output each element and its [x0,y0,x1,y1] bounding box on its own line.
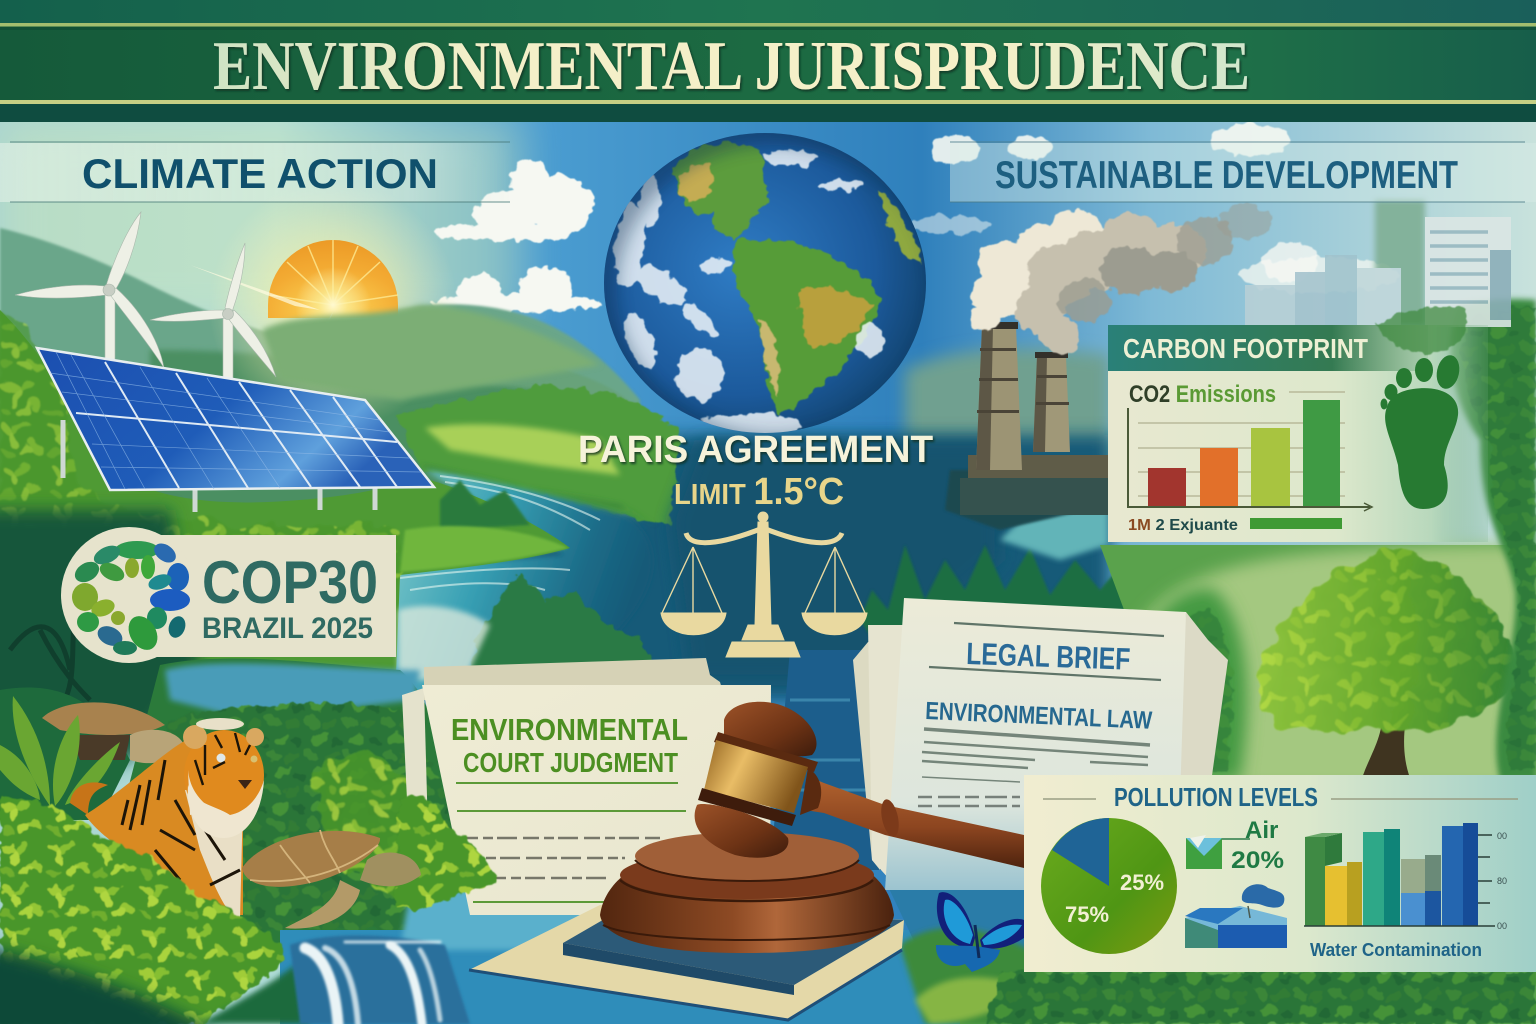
sustainable development heading [950,142,1536,202]
river [380,470,653,700]
mid trees [470,572,655,690]
riverside trees [440,480,530,530]
globe clouds [610,150,884,437]
3d bar chart: 80 [1497,876,1507,886]
court judgment document [402,658,771,915]
turtle back [42,702,184,763]
sun [190,180,600,430]
factory base dark [945,470,1108,530]
pollution title: POLLUTION LEVELS [1114,782,1318,812]
gavel head [695,702,821,858]
pie chart: 25% [1120,870,1164,895]
cop30 badge [61,527,396,663]
bar chart [1128,392,1372,511]
smoke [969,204,1271,353]
solar panel [37,348,434,512]
leaves over document [395,795,495,910]
pollution levels panel [1024,775,1536,972]
pie chart: 75% [1065,902,1109,927]
paris agreement text: PARIS AGREEMENT [578,429,933,471]
midline tree row [860,545,1210,650]
court judgment document: COURT JUDGMENT [463,747,678,778]
judgment fine print [462,838,660,878]
meadow [395,385,680,525]
climate action heading [0,142,515,202]
lower right foliage [885,880,1030,975]
gavel [600,702,1024,953]
turtle front [242,830,421,929]
judgment heading: ENVIRONMENTAL [451,712,688,747]
co2 label: CO2 Emissions [1129,381,1276,408]
far left trees [0,510,200,810]
title: ENVIRONMENTAL JURISPRUDENCE [213,28,1250,105]
continents [672,143,922,415]
scales of justice [661,512,867,657]
tiger [70,718,264,920]
butterfly [936,892,1024,972]
legal brief title: LEGAL BRIEF [966,636,1131,677]
left bank [0,310,570,700]
big tree [1258,548,1516,778]
lower water [280,930,960,1024]
3d bar chart: 00 [1497,921,1507,931]
right forest [900,545,1536,1024]
handle [805,778,1024,868]
cop30 text: COP30 [202,549,378,616]
air icon and label [1186,817,1284,874]
air icon and label: 20% [1231,847,1284,874]
book [469,905,904,1020]
plant fronds [0,696,120,806]
factory [960,204,1271,515]
top right trees [1450,299,1536,780]
3d bar chart: 00 [1497,831,1507,841]
turbine 2 [150,243,276,382]
air icon and label: Air [1245,817,1278,844]
city skyline [1245,200,1511,327]
clouds [430,124,1400,312]
foreground bright leaves [0,795,310,1024]
cop30 badge: BRAZIL 2025 [202,612,373,645]
carbon footprint panel [1108,307,1488,542]
water icon [1185,884,1287,948]
legend: 1M 2 Exjuante [1128,517,1238,534]
legal brief subtitle: ENVIRONMENTAL LAW [925,697,1153,735]
carbon footprint panel: CARBON FOOTPRINT [1123,333,1368,364]
title band [0,0,1536,122]
wind turbines [15,212,276,382]
tiger head [184,730,264,820]
turbine 1 [15,212,164,368]
far hills [0,228,640,560]
foreground mid foliage [120,659,490,960]
panel header [1108,325,1428,371]
climate action heading: CLIMATE ACTION [82,150,438,197]
dark river basin [380,435,1110,700]
cop30 logo [71,540,190,655]
waterfall [290,936,470,1024]
globe [604,133,926,433]
river highlights [400,476,600,590]
sound block [600,832,894,953]
limit: LIMIT 1.5°C [674,471,844,513]
pie chart [1041,818,1177,954]
3d bar chart [1304,823,1507,931]
paris agreement text [578,429,933,513]
water contamination label: Water Contamination [1310,940,1482,960]
icon: footprint [1380,353,1462,509]
legal brief document [853,598,1228,890]
